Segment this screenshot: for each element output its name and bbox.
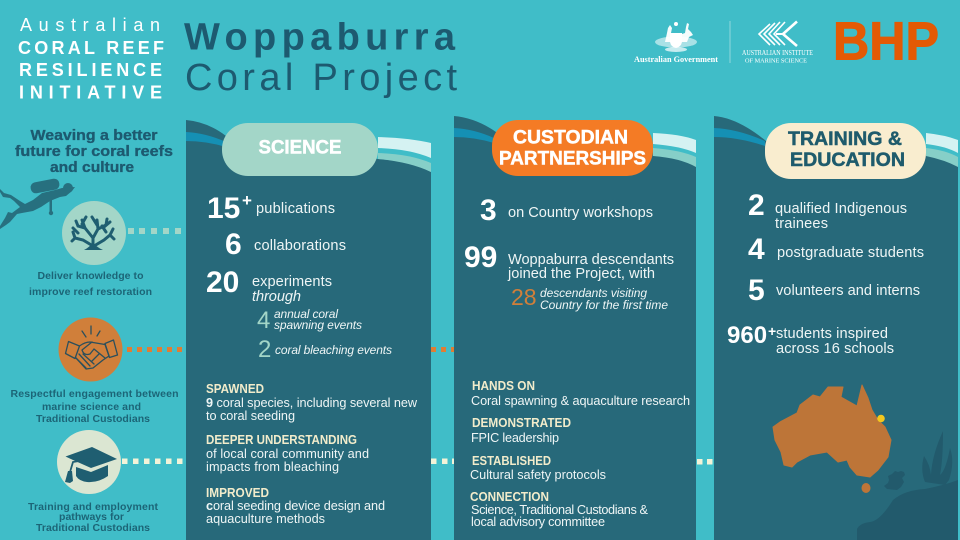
seabed and coral silhouette	[857, 431, 958, 540]
custodian wave light	[653, 133, 696, 153]
connector: coral dots	[128, 228, 181, 234]
training stats: students inspired	[776, 326, 888, 342]
training stats: postgraduate students	[777, 245, 924, 261]
caption: training: Training and employment	[28, 501, 158, 513]
science panel background	[186, 120, 431, 540]
science stats: annual coral	[274, 307, 338, 321]
caption: engagement: marine science and	[42, 401, 141, 413]
caption: engagement	[10, 388, 178, 425]
initiative name: CORAL REEF	[18, 38, 164, 58]
title: Woppaburra	[184, 16, 456, 58]
science outcomes: DEEPER UNDERSTANDING	[206, 433, 357, 447]
logo: Australian Institute of Marine Science	[742, 22, 814, 64]
science outcomes: IMPROVED	[206, 486, 269, 500]
training wave light	[926, 133, 958, 153]
training stats: 2	[748, 189, 765, 222]
custodian stats: Woppaburra descendants	[508, 252, 674, 268]
training stats: trainees	[775, 216, 828, 232]
training stats: across 16 schools	[776, 341, 894, 357]
custodian wave mint	[653, 148, 696, 167]
title: Coral Project	[185, 57, 457, 99]
training stats	[727, 189, 924, 357]
science stats: +	[242, 191, 252, 210]
science stats: experiments	[252, 274, 332, 290]
science outcomes: of local coral community and	[206, 447, 369, 461]
panel: science	[186, 120, 431, 540]
tagline: Weaving a better	[30, 127, 158, 144]
training stats: 960	[727, 322, 767, 349]
science stats	[206, 191, 392, 363]
panel: training and education	[714, 116, 958, 540]
training stats: +	[768, 323, 776, 339]
science outcomes: aquaculture methods	[206, 512, 325, 526]
science outcomes: to coral seeding	[206, 409, 295, 423]
caption: training	[28, 501, 158, 534]
custodian outcomes: ESTABLISHED	[472, 454, 551, 468]
initiative name	[18, 15, 164, 102]
science outcomes: SPAWNED	[206, 382, 264, 396]
logo: Australian Government	[634, 22, 718, 64]
logo: Australian Institute of Marine Science: OF MARINE SCIENCE	[745, 58, 807, 64]
initiative name: Australian	[20, 15, 160, 35]
science stats: collaborations	[254, 238, 346, 254]
custodian outcomes	[470, 379, 690, 529]
custodian outcomes: Coral spawning & aquaculture research	[471, 394, 690, 408]
science stats: 20	[206, 266, 239, 299]
science wave blue	[186, 132, 226, 147]
custodian panel background	[454, 116, 696, 540]
training wave blue	[714, 128, 765, 146]
custodian stats: 3	[480, 194, 497, 227]
custodian stats: joined the Project, with	[507, 266, 655, 282]
panel: custodian partnerships	[454, 116, 696, 540]
science stats: 6	[225, 228, 242, 261]
science stats: spawning events	[274, 318, 362, 332]
icon: handshake	[58, 318, 122, 382]
science pill	[222, 123, 378, 176]
logo: BHP: BHP	[833, 12, 939, 72]
map of Australia	[773, 385, 891, 493]
logo divider	[730, 21, 731, 63]
science stats: through	[252, 289, 301, 305]
custodian pill: PARTNERSHIPS	[499, 148, 646, 170]
custodian stats: 99	[464, 241, 497, 274]
icon: coral	[62, 201, 126, 265]
logo: Australian Institute of Marine Science: AUSTRALIAN INSTITUTE	[742, 49, 814, 57]
science stats: 4	[257, 307, 270, 334]
science outcomes: coral seeding device design and	[206, 499, 385, 513]
custodian stats: on Country workshops	[508, 205, 653, 221]
custodian pill: CUSTODIAN	[513, 126, 628, 148]
caption: engagement: Traditional Custodians	[36, 413, 150, 425]
custodian outcomes: local advisory committee	[471, 515, 605, 529]
training panel background	[714, 116, 958, 540]
caption: knowledge: improve reef restoration	[29, 286, 152, 298]
custodian outcomes: DEMONSTRATED	[472, 416, 571, 430]
science stats: 15	[207, 192, 240, 225]
custodian stats: 28	[511, 284, 537, 310]
custodian pill	[492, 120, 653, 176]
logo: Australian Government: Australian Government	[634, 55, 718, 64]
training stats: 5	[748, 274, 765, 307]
caption: training: Traditional Custodians	[36, 522, 150, 534]
training stats: 4	[748, 233, 765, 266]
custodian outcomes: Science, Traditional Custodians &	[471, 503, 649, 517]
custodian outcomes: CONNECTION	[470, 490, 549, 504]
initiative name: RESILIENCE	[19, 60, 162, 80]
custodian outcomes: HANDS ON	[472, 379, 535, 393]
training pill: EDUCATION	[790, 149, 905, 171]
caption: knowledge	[29, 270, 152, 298]
science pill: SCIENCE	[258, 136, 342, 158]
initiative name: INITIATIVE	[19, 82, 162, 102]
icon: graduation cap	[57, 430, 121, 494]
custodian outcomes: FPIC leadership	[471, 431, 559, 445]
tagline: and culture	[50, 159, 134, 176]
training pill: TRAINING &	[788, 128, 902, 150]
training pill	[765, 123, 926, 179]
custodian wave blue	[454, 128, 494, 143]
training stats: qualified Indigenous	[775, 201, 907, 217]
custodian outcomes: Cultural safety protocols	[470, 468, 606, 482]
training wave mint	[926, 148, 958, 167]
science stats: coral bleaching events	[275, 343, 392, 357]
tagline	[15, 127, 173, 176]
caption: engagement: Respectful engagement between	[10, 388, 178, 400]
tagline: future for coral reefs	[15, 143, 173, 160]
science wave light	[378, 137, 431, 158]
science stats: publications	[256, 201, 335, 217]
caption: training: pathways for	[59, 511, 124, 523]
icon: diver	[0, 178, 75, 229]
custodian stats	[464, 194, 674, 312]
custodian stats: descendants visiting	[540, 286, 647, 300]
science outcomes: 9 coral species, including several new	[206, 396, 418, 410]
connector: handshake dots	[127, 347, 454, 352]
title	[184, 16, 457, 99]
caption: knowledge: Deliver knowledge to	[38, 270, 144, 282]
science outcomes	[206, 382, 418, 526]
science wave mint	[378, 153, 431, 172]
science outcomes: impacts from bleaching	[206, 460, 339, 474]
science stats: 2	[258, 336, 271, 363]
connector: graduation dots	[122, 458, 712, 464]
training stats: volunteers and interns	[776, 283, 920, 299]
custodian stats: Country for the first time	[540, 298, 668, 312]
location marker	[877, 415, 885, 422]
